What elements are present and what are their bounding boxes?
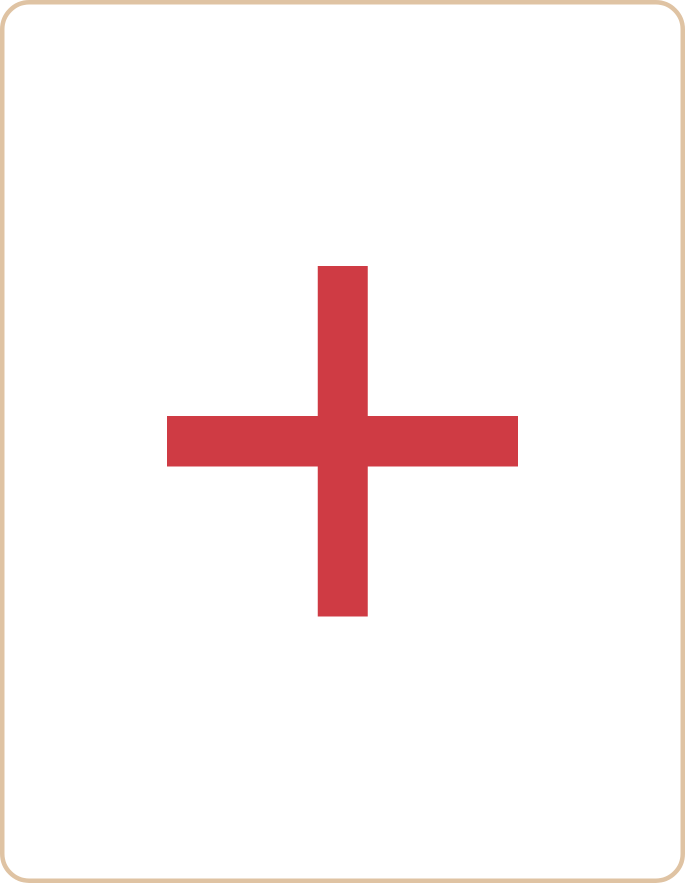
icon: red plus sign (167, 266, 518, 616)
